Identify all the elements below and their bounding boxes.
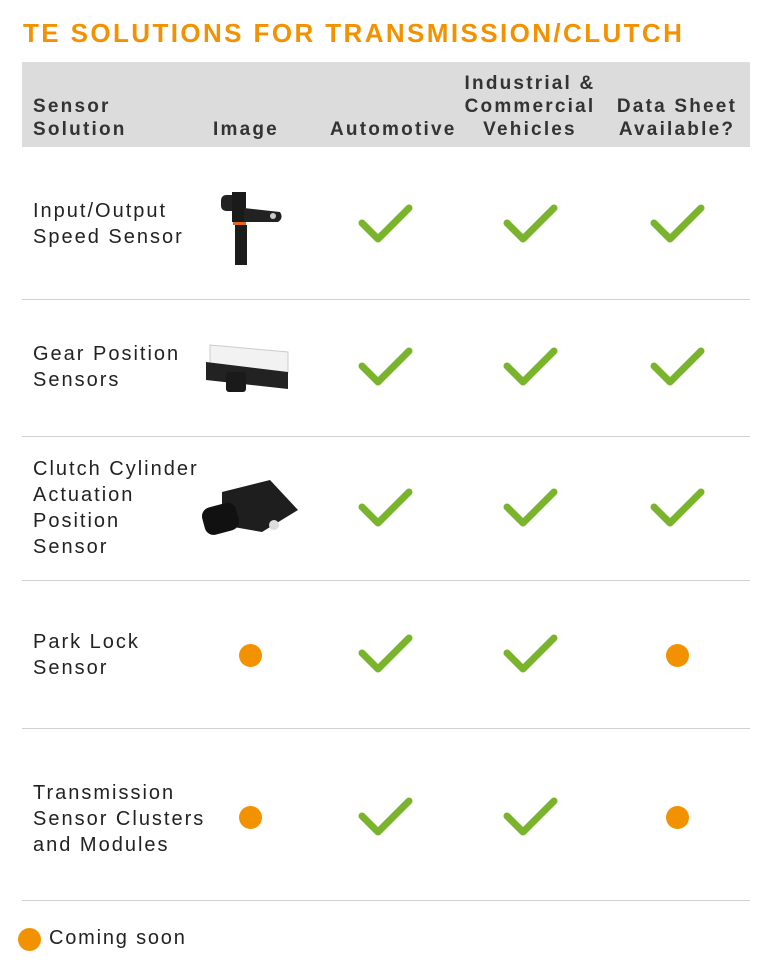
text: Park Lock	[33, 631, 140, 653]
header: industrial: Industrial &	[465, 73, 595, 94]
header: automotive: Automotive	[330, 119, 456, 140]
header: sensor solution: Sensor	[33, 96, 111, 117]
row labels: Speed Sensor	[33, 226, 184, 248]
text: Actuation	[33, 484, 134, 506]
legend: Coming soon	[49, 927, 187, 949]
header: data sheet	[617, 96, 737, 140]
header: data sheet: Data Sheet	[617, 96, 737, 117]
text: Transmission	[33, 782, 175, 804]
coming soon dots	[239, 644, 262, 667]
text: Sensor	[33, 536, 108, 558]
header: industrial: Commercial	[465, 96, 595, 117]
header: image: Image	[213, 119, 279, 140]
text: and Modules	[33, 834, 170, 856]
image: gear position	[206, 345, 288, 392]
title: TE SOLUTIONS FOR TRANSMISSION/CLUTCH	[23, 18, 684, 48]
text: Sensor Clusters	[33, 808, 205, 830]
image: speed sensor	[221, 192, 282, 265]
image: clutch sensor	[200, 480, 298, 537]
text: Clutch Cylinder	[33, 458, 199, 480]
text: Gear Position	[33, 343, 180, 365]
header: sensor solution: Solution	[33, 119, 127, 140]
row labels: Input/Output	[33, 200, 167, 222]
header: data sheet: Available?	[619, 119, 735, 140]
header: sensor solution	[33, 96, 127, 140]
text: Position	[33, 510, 120, 532]
header: industrial: Vehicles	[483, 119, 577, 140]
checks	[362, 208, 701, 832]
header bar	[22, 62, 750, 147]
text: Sensors	[33, 369, 120, 391]
text: Sensor	[33, 657, 108, 679]
header: industrial	[465, 73, 595, 140]
row labels	[33, 200, 184, 248]
